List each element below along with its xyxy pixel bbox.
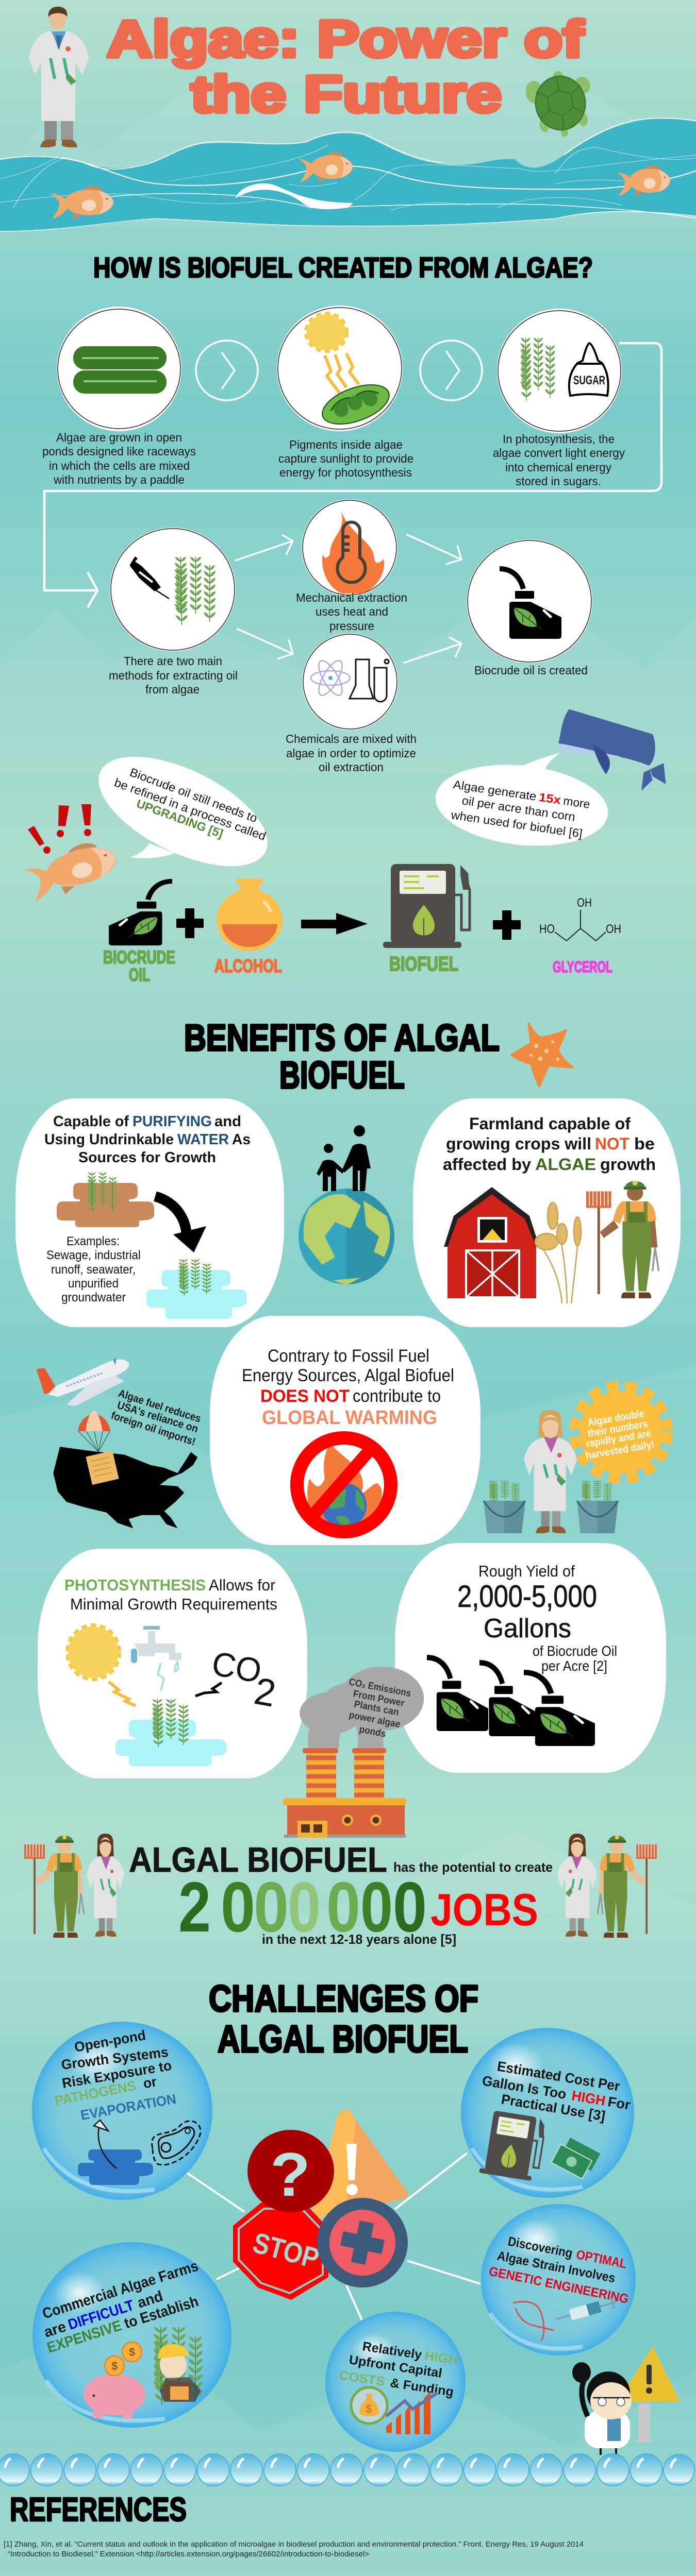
- icon: light rays: [325, 353, 359, 397]
- icon: fish 1: [51, 186, 113, 219]
- icon: water drops: [158, 1662, 178, 1691]
- icon: USA map: [53, 1447, 197, 1528]
- references text: [4, 2540, 608, 2576]
- icon: piggy bank with coins: $: [129, 2346, 135, 2359]
- callout: 15x more oil: oil per acre than corn: [461, 793, 576, 824]
- heading: benefits: BENEFITS OF ALGAL: [184, 1018, 500, 1059]
- icon: clean water: [146, 1270, 246, 1319]
- bubble: genetic engineering: [481, 2204, 636, 2355]
- examples text: Sewage, industrial: [46, 1248, 141, 1262]
- number: 2,000,000: 0: [254, 1868, 289, 1947]
- icon: left bucket: [484, 1481, 525, 1533]
- label: biocrude oil: OIL: [129, 965, 150, 985]
- bubble: high cost: [461, 2028, 634, 2198]
- caption: step 2: capture sunlight to provide: [278, 452, 413, 465]
- text: GLOBAL WARMING: [262, 1407, 437, 1429]
- number: 2,000,000: 0: [360, 1868, 393, 1947]
- icon: parachute: [78, 1410, 110, 1452]
- callout: algae double: rapidly and are: [585, 1428, 652, 1450]
- icon: cloud: [300, 1667, 424, 1748]
- caption: two methods: There are two main: [124, 654, 222, 668]
- icon: woman with warning sign: [572, 2346, 680, 2455]
- icon: money: [551, 2135, 600, 2181]
- bubble: commercial farms: are: [42, 2318, 68, 2341]
- text: CO2 emissions: From Power: [352, 1688, 406, 1709]
- text: reduce reliance: [109, 1387, 203, 1448]
- callout: 15x more oil: Algae generate: [452, 777, 537, 803]
- icon: scientist: [524, 1410, 577, 1534]
- caption: chemicals: Chemicals are mixed with: [286, 732, 417, 745]
- text: 2,000-5,000: [457, 1579, 597, 1614]
- icon: raceway ponds: [73, 346, 167, 394]
- panel: farmland: [413, 1098, 681, 1327]
- step 2: sunlight capture: [277, 306, 403, 432]
- caption: step 1: with nutrients by a paddle: [53, 473, 185, 486]
- arrow 1: [196, 341, 258, 400]
- caption: step 3: stored in sugars.: [516, 474, 601, 488]
- panel: photosynthesis: [38, 1549, 307, 1778]
- bubble: upfront costs: Relatively: [361, 2339, 423, 2362]
- building: [283, 1798, 406, 1838]
- icon: water: [78, 2149, 153, 2185]
- examples text: groundwater: [61, 1291, 126, 1304]
- text: Gallons: [484, 1614, 571, 1643]
- caption: two methods: [109, 654, 238, 696]
- number: 2,000,000: 0: [221, 1868, 255, 1947]
- text: CO2 emissions: Plants can: [353, 1699, 400, 1718]
- heading text: Farmland capable of: [469, 1114, 631, 1133]
- heading text: WATER: [177, 1131, 229, 1148]
- icon: biofuel pump: [383, 864, 470, 948]
- icon: adult: [342, 1125, 371, 1191]
- caption: step 1: in which the cells are mixed: [49, 459, 190, 472]
- icon: scientist: [29, 6, 89, 148]
- plus: [177, 909, 203, 938]
- icon: farmer: [586, 1181, 659, 1298]
- step 3: sugar: [497, 309, 622, 433]
- icon: right bucket: [577, 1481, 618, 1533]
- icon: sugar sack: [569, 343, 608, 396]
- step 4: extraction methods: [110, 528, 236, 651]
- heading text: Capable of: [53, 1113, 129, 1130]
- caption: two methods: from algae: [145, 683, 200, 696]
- heading: benefits: BIOFUEL: [279, 1054, 405, 1096]
- bubble: genetic engineering: Algae Strain Involves: [496, 2248, 617, 2285]
- bubble: genetic engineering: GENETIC ENGINEERING: [488, 2264, 630, 2307]
- bubble: genetic engineering: Discovering: [507, 2234, 574, 2261]
- bubble: genetic engineering: OPTIMAL: [575, 2247, 628, 2272]
- icon: rising chart: [386, 2392, 437, 2434]
- heading: challenges: CHALLENGES OF: [209, 1978, 478, 2020]
- icon: wheat: [535, 1202, 581, 1303]
- caption: step 1: ponds designed like raceways: [42, 445, 196, 458]
- heading: benefits: [184, 1018, 500, 1096]
- icon: warning triangle: [309, 2109, 408, 2221]
- icon: flame: [322, 510, 384, 594]
- arrows: extraction flow: [235, 534, 461, 663]
- text: PHOTOSYNTHESIS: [64, 1576, 206, 1594]
- text: reduce reliance: Algae fuel reduces: [117, 1387, 203, 1425]
- label: biocrude oil: BIOCRUDE: [103, 947, 175, 968]
- number: 2,000,000: 2: [178, 1868, 211, 1947]
- icon: scientist left: [87, 1834, 124, 1937]
- heading text: [44, 1113, 251, 1166]
- text: jobs: JOBS: [430, 1884, 538, 1935]
- icon: thermometer: [338, 522, 365, 582]
- icon: scientist with buckets: [484, 1410, 618, 1534]
- icon: syringe: [554, 2297, 618, 2325]
- icon: chloroplast: [317, 377, 394, 432]
- icon: test tube: [374, 659, 389, 702]
- icon: stop sign: [233, 2202, 328, 2300]
- bubble: upfront costs: & Funding: [389, 2376, 455, 2399]
- heading text: and: [214, 1113, 241, 1130]
- bubble divider: [0, 2454, 694, 2486]
- text: CO2: 2: [251, 1669, 279, 1715]
- icon: fuel pump: [479, 2110, 546, 2182]
- icon: evaporation arrow: [94, 2120, 117, 2168]
- icon: sugar sack: SUGAR: [573, 374, 605, 387]
- icon: algae: [175, 557, 216, 625]
- bubble: high cost: Practical Use [3]: [500, 2091, 606, 2124]
- icon: fish 2: [299, 152, 353, 183]
- connector lines: [187, 2153, 480, 2320]
- text: DOES NOT: [260, 1386, 350, 1406]
- arrow: sun to algae: [109, 1682, 136, 1706]
- heading text: [443, 1114, 656, 1174]
- label: glycerol: GLYCEROL: [553, 958, 612, 976]
- examples text: runoff, seawater,: [51, 1263, 136, 1277]
- icon: syringe: [130, 556, 169, 599]
- number: 2,000,000: 0: [288, 1868, 321, 1947]
- bubble: upfront costs: [325, 2312, 466, 2452]
- bubble: commercial farms: Commercial Algae Farms: [40, 2258, 201, 2323]
- heading text: ALGAE: [535, 1155, 596, 1174]
- text: algal biofuel: ALGAL BIOFUEL: [129, 1840, 387, 1879]
- heading text: growth: [600, 1155, 656, 1174]
- text: Minimal Growth Requirements: [70, 1595, 277, 1613]
- icon: starfish: [511, 1023, 573, 1087]
- bubble: high cost: Gallon Is Too: [481, 2073, 568, 2102]
- heading text: NOT: [595, 1134, 629, 1153]
- text: potential: has the potential to create: [393, 1859, 553, 1875]
- icon: faucet: [131, 1626, 181, 1663]
- caption: chemicals: [286, 732, 417, 774]
- bubble: commercial farms: EXPENSIVE: [45, 2317, 124, 2357]
- icon: worried fish: [21, 836, 122, 903]
- icon: crate: [86, 1451, 119, 1485]
- bubble: commercial farms: DIFFICULT: [66, 2297, 136, 2333]
- step 5: mechanical extraction: [302, 499, 397, 596]
- icon: money bag: [351, 2387, 387, 2424]
- panel: purifying water: [15, 1098, 284, 1327]
- label: biofuel: BIOFUEL: [389, 953, 458, 975]
- bubble: upfront costs: HIGH: [424, 2348, 459, 2368]
- icon: flask: [350, 659, 373, 699]
- icon: piggy bank with coins: $: [111, 2360, 118, 2372]
- heading text: Sources for Growth: [78, 1149, 216, 1166]
- heading text: be: [634, 1134, 655, 1153]
- caption: step 2: energy for photosynthesis: [279, 466, 412, 479]
- icon: stop sign: STOP: [250, 2226, 323, 2275]
- icon: algae: [178, 1259, 211, 1296]
- text: CO2: [209, 1644, 279, 1715]
- caption: step 3: into chemical energy: [505, 461, 611, 474]
- text: [64, 1576, 277, 1613]
- icon: scientist right: [557, 1834, 597, 1937]
- callout: 15x more oil: 15x: [538, 790, 562, 807]
- heading text: growing crops will: [446, 1134, 591, 1153]
- equation: [103, 864, 621, 985]
- bubble: open pond risks: PATHOGENS: [53, 2078, 137, 2109]
- label: biocrude oil: [103, 947, 175, 985]
- callout: upgrading: [82, 734, 284, 889]
- caption: chemicals: algae in order to optimize: [286, 747, 416, 760]
- examples text: [46, 1234, 141, 1304]
- icon: worker with laurel: [153, 2327, 203, 2405]
- callout: upgrading: UPGRADING [5]: [135, 796, 225, 840]
- icon: oil jug: [500, 569, 561, 639]
- callout: 15x more oil: [432, 753, 612, 854]
- step 7: biocrude created: [467, 539, 592, 663]
- icon: stop sign and warnings: [233, 2109, 408, 2300]
- text: [242, 1346, 454, 1429]
- icon: alcohol flask: [217, 878, 283, 951]
- text: Rough Yield of: [478, 1562, 575, 1580]
- bubble: open pond risks: Risk Exposure to: [61, 2058, 173, 2091]
- icon: dirty water: [57, 1183, 154, 1227]
- bubble: open pond risks: or: [142, 2074, 158, 2091]
- plus: [493, 911, 520, 939]
- caption: step 3: algae convert light energy: [493, 446, 625, 460]
- arrow: curved: [155, 1196, 206, 1252]
- icon: oil jugs: [427, 1657, 595, 1746]
- wave band: [0, 118, 696, 231]
- caption: mechanical: uses heat and: [316, 605, 388, 618]
- caption: step 1: Algae are grown in open: [56, 431, 182, 444]
- bubble: high cost: HIGH: [571, 2088, 607, 2109]
- bubble: commercial farms: and: [136, 2288, 165, 2312]
- jobs section: [24, 1834, 657, 1947]
- icon: plus circle: [317, 2198, 408, 2287]
- arrow: [301, 913, 368, 935]
- caption: mechanical: pressure: [329, 619, 374, 633]
- callout: 15x more oil: when used for biofuel [6]: [450, 808, 583, 840]
- glycerol molecule: HO: [539, 922, 555, 936]
- callout: 15x more oil: more: [562, 794, 591, 811]
- heading: challenges: [209, 1978, 478, 2060]
- heading text: As: [232, 1131, 251, 1148]
- text: Contrary to Fossil Fuel: [268, 1346, 429, 1366]
- glycerol molecule: OH: [577, 896, 592, 910]
- chimney right: [352, 1748, 386, 1799]
- bubble: open pond risks: Open-pond: [73, 2027, 147, 2055]
- caption: chemicals: oil extraction: [319, 760, 384, 774]
- icon: airplane: [37, 1358, 129, 1406]
- text: contribute to: [353, 1386, 441, 1406]
- icon: sun: [68, 1626, 119, 1678]
- bubble: high cost: For: [607, 2094, 632, 2113]
- step 1: open ponds: [57, 307, 181, 431]
- title: the Future: [191, 65, 502, 123]
- bubble: commercial farms: [32, 2242, 231, 2428]
- text: reduce reliance: USA's reliance on: [116, 1399, 200, 1435]
- callout: upgrading: be refined in a process called: [112, 775, 268, 843]
- callout: algae double: Algae double: [587, 1408, 645, 1429]
- number: 2,000,000: [178, 1868, 427, 1947]
- icon: algae: [521, 337, 555, 401]
- examples text: Examples:: [67, 1234, 120, 1248]
- icon: piggy bank with coins: [84, 2342, 145, 2418]
- caption: two methods: methods for extracting oil: [109, 669, 238, 682]
- text: in the next: in the next 12-18 years alone [5]: [262, 1931, 456, 1947]
- heading: references: REFERENCES: [10, 2490, 187, 2528]
- icon: people on earth: [299, 1125, 394, 1285]
- icon: whale: [558, 709, 666, 791]
- icon: dna: [513, 2302, 554, 2341]
- icon: globe: [299, 1189, 394, 1285]
- panel: global warming: [210, 1316, 480, 1545]
- heading: challenges: ALGAL BIOFUEL: [218, 2018, 468, 2060]
- text: Energy Sources, Algal Biofuel: [242, 1366, 454, 1385]
- icon: farmer left: [24, 1835, 84, 1938]
- label: alcohol: ALCOHOL: [214, 956, 282, 976]
- icon: pathogen: [152, 2121, 201, 2165]
- icon: farmer right: [598, 1835, 657, 1938]
- text: CO2 emissions: ponds: [358, 1724, 387, 1740]
- process connector line: [44, 343, 661, 607]
- references text: “Introduction to Biodiesel.” Extension <http://articles.extension.org/pages/26602/introduction-to-biodiesel>: [8, 2550, 369, 2558]
- glycerol molecule: [539, 896, 621, 941]
- heading: how is biofuel created: HOW IS BIOFUEL CREATED FROM ALGAE?: [93, 251, 593, 283]
- caption: biocrude: Biocrude oil is created: [474, 664, 588, 677]
- icon: fish 3: [617, 165, 670, 197]
- step 6: chemical extraction: [302, 633, 398, 730]
- heading text: Using Undrinkable: [44, 1131, 174, 1148]
- text: of Biocrude Oil: [533, 1643, 617, 1659]
- caption: mechanical: Mechanical extraction: [296, 591, 407, 604]
- callout: algae double: harvested daily!: [585, 1439, 655, 1462]
- bubble: open pond risks: EVAPORATION: [79, 2091, 177, 2123]
- heading text: PURIFYING: [132, 1113, 212, 1130]
- bubble: upfront costs: Upfront Capital: [348, 2352, 443, 2381]
- arrow 2: [420, 341, 482, 400]
- examples text: unpurified: [68, 1277, 119, 1291]
- icon: child: [317, 1144, 344, 1191]
- text: CO2 emissions: CO₂ Emissions: [348, 1676, 412, 1699]
- callout: algae double: their numbers: [587, 1418, 649, 1439]
- icon: algae: [152, 1699, 189, 1747]
- number: 2,000,000: 0: [393, 1868, 427, 1947]
- caption: step 3: In photosynthesis, the: [503, 432, 615, 446]
- text: per Acre [2]: [541, 1658, 607, 1674]
- chimney left: [303, 1748, 338, 1799]
- text: [457, 1562, 617, 1674]
- icon: question circle: [247, 2130, 334, 2212]
- caption: step 2: [278, 438, 413, 479]
- icon: factory with cloud: [283, 1667, 424, 1838]
- caption: step 1: [42, 431, 196, 486]
- panel: yield: [395, 1543, 666, 1773]
- text: Allows for: [209, 1576, 275, 1594]
- heading text: affected by: [443, 1155, 531, 1174]
- bubble: open pond risks: Growth Systems: [60, 2044, 169, 2073]
- icon: pond: [115, 1720, 226, 1766]
- bubble: commercial farms: to Establish: [122, 2293, 201, 2332]
- icon: biocrude jug: [109, 881, 172, 945]
- caption: step 3: [493, 432, 625, 488]
- text: CO2 emissions: [348, 1676, 412, 1740]
- title: [107, 10, 584, 123]
- text: CO2 emissions: power algae: [348, 1709, 401, 1730]
- callout: upgrading: Biocrude oil still needs to: [128, 765, 259, 825]
- icon: no burning earth: [297, 1438, 391, 1532]
- icon: question circle: ?: [270, 2140, 310, 2209]
- number: 2,000,000: 0: [326, 1868, 360, 1947]
- icon: barn: [444, 1187, 539, 1298]
- caption: step 2: Pigments inside algae: [289, 438, 403, 451]
- bubble: high cost: Estimated Cost Per: [496, 2058, 621, 2094]
- icon: sun: [307, 314, 346, 350]
- bubble: open pond risks: [32, 2022, 212, 2200]
- icon: algae: [88, 1172, 117, 1212]
- glycerol molecule: OH: [606, 922, 621, 936]
- text: reduce reliance: foreign oil imports!: [109, 1410, 197, 1448]
- arrow: CO2 to algae: [195, 1683, 222, 1696]
- text: CO2: CO: [209, 1644, 264, 1690]
- callout: algae double: [575, 1386, 668, 1479]
- title: Algae: Power of: [107, 10, 584, 68]
- icon: money bag: $: [366, 2402, 372, 2415]
- icon: atom: [311, 657, 350, 699]
- icon: turtle: [523, 67, 597, 141]
- references text: [1] Zhang, Xin, et al. “Current status and outlook in the application of microalgae in biodiesel production and environmental protection.” Front. Energy Res, 19 August 2014: [4, 2540, 584, 2549]
- caption: mechanical: [296, 591, 407, 633]
- bubble: upfront costs: COSTS: [338, 2368, 386, 2389]
- icon: exclamation marks: [28, 804, 91, 854]
